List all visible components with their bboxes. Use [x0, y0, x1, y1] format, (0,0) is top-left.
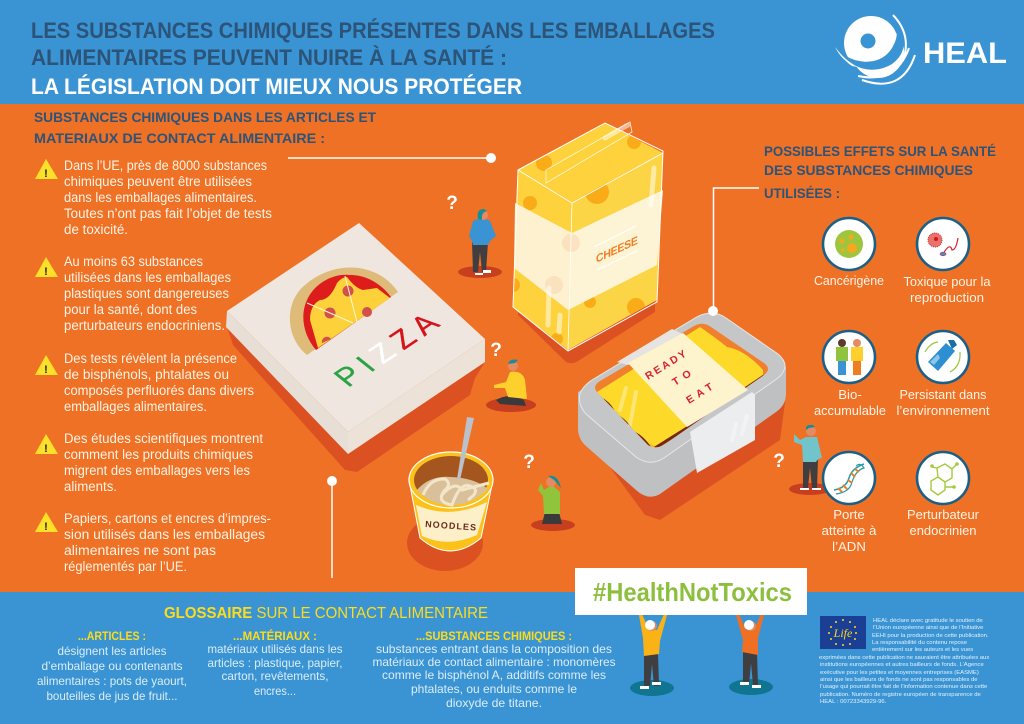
tray label: TO [670, 368, 694, 389]
title: LES SUBSTANCES CHIMIQUES PRÉSENTES DANS LES EMBALLAGES [31, 18, 715, 43]
glossary: chemicals: phtalates, ou enduits comme le [411, 682, 577, 696]
question mark 1: ? [446, 193, 458, 214]
tray label: EAT [684, 381, 716, 407]
orange main panel [0, 104, 1024, 592]
funding disclaimer [819, 618, 989, 705]
ready-to-eat tray [578, 312, 786, 520]
label: endocrine disruptor: endocrinien [910, 523, 976, 538]
glossary: materials [208, 628, 342, 698]
label: bioaccumulative: accumulable [814, 403, 886, 418]
label: persistent: Persistant dans [900, 387, 987, 402]
label: endocrine disruptor [907, 507, 980, 538]
label: bioaccumulative: Bio- [838, 387, 862, 402]
glossary: articles: ...ARTICLES : [78, 629, 146, 643]
cheese box [506, 122, 663, 363]
icon: reproduction [917, 218, 969, 270]
label: DNA: l’ADN [832, 539, 866, 554]
pizza box [226, 223, 485, 472]
left heading: SUBSTANCES CHIMIQUES DANS LES ARTICLES ET [34, 109, 376, 125]
warning item 3 [35, 351, 254, 414]
warning item 1 [35, 158, 272, 237]
warning item 3: Des tests révèlent la présence [64, 351, 237, 366]
funding disclaimer: entièrement sur les auteurs et les vues [872, 647, 973, 653]
warning item 5: Papiers, cartons et encres d’impres- [64, 511, 271, 526]
glossary: chemicals [372, 629, 616, 710]
question mark 2: ? [490, 340, 502, 361]
right heading: UTILISÉES : [764, 185, 840, 201]
pizza label: PIZZA [327, 308, 447, 392]
warning item 2: utilisées dans les emballages [64, 270, 231, 285]
warning item 1: de toxicité. [64, 222, 128, 237]
glossary heading: GLOSSAIRE SUR LE CONTACT ALIMENTAIRE [164, 605, 488, 622]
warning item 5: réglementés par l’UE. [64, 559, 187, 574]
campaign banner [575, 568, 807, 615]
connector: effects to tray [708, 188, 759, 316]
question mark 4: ? [773, 451, 785, 472]
cheese label: CHEESE [596, 235, 638, 266]
question mark 3: ? [523, 452, 535, 473]
label: reproduction: reproduction [910, 290, 984, 305]
HEAL logo: HEAL [923, 37, 1007, 70]
glossary: articles [37, 629, 187, 703]
warning item 3: composés perfluorés dans divers [64, 383, 254, 398]
warning item 2: Au moins 63 substances [64, 254, 203, 269]
person: teal standing [789, 425, 831, 495]
funding disclaimer: La responsabilité du contenu repose [872, 640, 968, 646]
cheese label [594, 226, 638, 270]
glossary: chemicals: comme le bisphénol A, additifs comme les [382, 668, 606, 682]
label: DNA [822, 507, 877, 554]
warning item 1: ! [44, 168, 48, 180]
label: persistent: l’environnement [896, 403, 990, 418]
funding disclaimer: exécutive pour les petites et moyennes entreprises (EASME) [820, 670, 979, 676]
title: LA LÉGISLATION DOIT MIEUX NOUS PROTÉGER [31, 74, 522, 99]
tray label [643, 348, 716, 407]
funding disclaimer: HEAL : 00723343929-96. [820, 699, 887, 705]
glossary: materials: carton, revêtements, [222, 669, 328, 683]
glossary: chemicals: matériaux de contact alimentaire : monomères [372, 655, 616, 669]
label: reproduction: Toxique pour la [904, 274, 991, 289]
glossary: materials: articles : plastique, papier, [208, 656, 342, 670]
warning item 4: ! [44, 443, 48, 455]
label: bioaccumulative [814, 387, 886, 418]
campaign banner: #HealthNotToxics [593, 577, 792, 607]
icon: cancerigenic [823, 218, 875, 270]
campaign person right [729, 614, 773, 695]
warning item 1: dans les emballages alimentaires. [64, 190, 257, 205]
glossary: materials: encres... [254, 684, 296, 698]
funding disclaimer: ainsi que les bailleurs de fonds ne sont pas responsables de [820, 677, 978, 683]
warning item 4: comment les produits chimiques [64, 447, 253, 462]
glossary: articles: bouteilles de jus de fruit... [46, 689, 178, 703]
person: green kneeling [531, 476, 575, 531]
icon: bioaccumulative [823, 331, 875, 383]
connector: noodles text [327, 476, 337, 578]
icon: endocrine disruptor [917, 452, 969, 504]
warning item 3: emballages alimentaires. [64, 399, 207, 414]
tray window [595, 324, 768, 450]
glossary: materials: ...MATÉRIAUX : [233, 628, 317, 643]
label: persistent [896, 387, 990, 418]
funding disclaimer: exprimées dans cette publication ne sauraient être attribuées aux [819, 655, 989, 661]
warning item 5 [35, 511, 271, 574]
cheese holes [506, 135, 645, 345]
label: DNA: atteinte à [822, 523, 877, 538]
warning item 4: aliments. [64, 479, 117, 494]
label: cancerigenic: Cancérigène [814, 273, 884, 288]
funding disclaimer: EEHI pour la production de cette publication. [872, 633, 989, 639]
noodle cup [407, 417, 493, 571]
label: endocrine disruptor: Perturbateur [907, 507, 980, 522]
funding disclaimer: institutions européennes et autres bailleurs de fonds. L’Agence [820, 662, 984, 668]
icon: DNA [823, 452, 875, 504]
right heading [764, 143, 996, 201]
warning item 2: plastiques sont dangereuses [64, 286, 229, 301]
glossary: chemicals: dioxyde de titane. [446, 696, 542, 710]
EU LIFE logo [820, 616, 866, 649]
left heading: MATERIAUX DE CONTACT ALIMENTAIRE : [34, 130, 325, 146]
warning item 4: migrent des emballages vers les [64, 463, 250, 478]
glossary: articles: d’emballage ou contenants [42, 659, 182, 673]
funding disclaimer: l’Union européenne ainsi que de l’Initiative [873, 625, 984, 631]
pizza window [290, 267, 398, 355]
glossary: articles: désignent les articles [58, 644, 166, 658]
noodles label: NOODLES [425, 519, 476, 533]
title: ALIMENTAIRES PEUVENT NUIRE À LA SANTÉ : [31, 45, 507, 70]
glossary: chemicals: substances entrant dans la composition des [376, 642, 612, 656]
warning item 2 [35, 254, 231, 333]
warning item 2: ! [44, 266, 48, 278]
HEAL logo [835, 15, 1007, 84]
person: blue [458, 209, 502, 278]
glossary: materials: matériaux utilisés dans les [208, 642, 342, 656]
title [31, 18, 715, 99]
warning item 4 [35, 431, 263, 494]
person: yellow seated [486, 360, 536, 412]
warning item 2: pour la santé, dont des [64, 302, 197, 317]
header band [0, 0, 1024, 104]
funding disclaimer: HEAL déclare avec gratitude le soutien de [873, 618, 984, 624]
warning item 5: sion utilisés dans les emballages [64, 527, 265, 542]
glossary: chemicals: ...SUBSTANCES CHIMIQUES : [416, 629, 572, 643]
warning item 1: chimiques peuvent être utilisées [64, 174, 252, 189]
warning item 5: alimentaires ne sont pas [64, 543, 216, 558]
warning item 3: de bisphénols, phtalates ou [64, 367, 229, 382]
left heading [34, 109, 376, 146]
warning item 1: Toutes n’ont pas fait l’objet de tests [64, 206, 272, 221]
right heading: POSSIBLES EFFETS SUR LA SANTÉ [764, 143, 996, 159]
icon: persistent [917, 331, 969, 383]
connector: text to cheese [288, 153, 496, 163]
warning item 1: Dans l’UE, près de 8000 substances [64, 158, 267, 173]
funding disclaimer: publication. Numéro de registre européen de transparence de [820, 692, 982, 698]
campaign person left [630, 614, 674, 696]
glossary: articles: alimentaires : pots de yaourt, [37, 674, 187, 688]
funding disclaimer: l’usage qui pourrait être fait de l’information contenue dans cette [820, 684, 988, 690]
warning item 4: Des études scientifiques montrent [64, 431, 263, 446]
warning item 2: perturbateurs endocriniens. [64, 318, 225, 333]
tray band [617, 329, 755, 473]
warning item 5: ! [44, 521, 48, 533]
footer band [0, 592, 1024, 724]
warning item 3: ! [44, 364, 48, 376]
label: DNA: Porte [833, 507, 865, 522]
EU LIFE logo: Life [833, 626, 853, 640]
tray label: READY [643, 348, 689, 383]
label: reproduction [904, 274, 991, 305]
right heading: DES SUBSTANCES CHIMIQUES [764, 162, 973, 178]
